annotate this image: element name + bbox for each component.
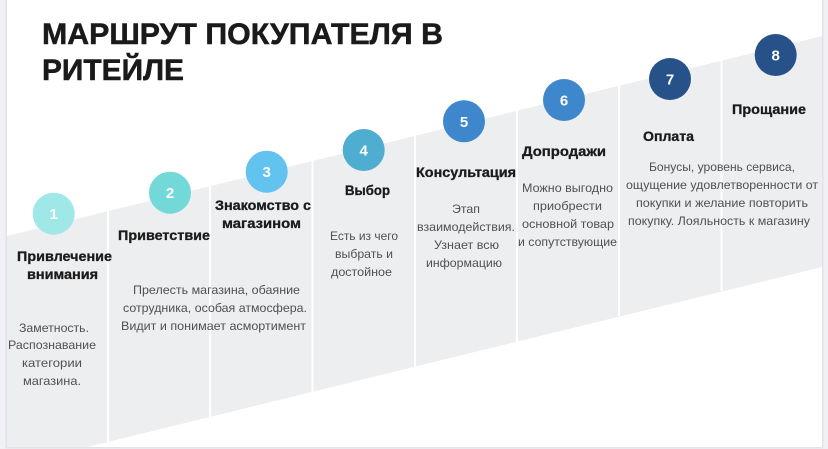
step 3: магазином bbox=[222, 216, 301, 231]
step 1: Привлечение bbox=[17, 249, 113, 264]
step 6: и сопутствующие bbox=[518, 235, 617, 249]
step 7: покупки и желание повторить bbox=[636, 196, 808, 210]
step 1: 1 bbox=[50, 206, 58, 223]
title: МАРШРУТ ПОКУПАТЕЛЯ В bbox=[42, 18, 443, 51]
step 5: Консультация bbox=[416, 165, 516, 180]
step 5: Этап bbox=[452, 202, 480, 216]
step 8 bbox=[732, 34, 807, 117]
step 6: Допродажи bbox=[522, 144, 606, 159]
step 4: 4 bbox=[360, 142, 369, 160]
step 1: Заметность. bbox=[19, 321, 89, 335]
step 6: 6 bbox=[560, 92, 568, 110]
step 6 bbox=[518, 79, 617, 249]
step 4: Есть из чего bbox=[330, 229, 398, 243]
step 8: 8 bbox=[772, 48, 780, 64]
step 7 bbox=[626, 58, 819, 228]
step 1 bbox=[8, 193, 113, 388]
step 3: Знакомство с bbox=[215, 198, 312, 213]
step 6: Можно выгодно bbox=[522, 181, 613, 195]
step 4: Выбор bbox=[345, 183, 390, 198]
step 2: Видит и понимает асмортимент bbox=[121, 319, 307, 333]
step 3: 3 bbox=[263, 164, 271, 181]
step 2: 2 bbox=[166, 185, 174, 202]
step 1: Распознавание bbox=[8, 338, 96, 352]
step 6: основной товар bbox=[522, 217, 614, 231]
step 2: сотрудника, особая атмосфера. bbox=[123, 301, 307, 315]
step 7: Бонусы, уровень сервиса, bbox=[649, 160, 795, 174]
step 1: внимания bbox=[27, 267, 98, 282]
step 4: выбрать и bbox=[335, 247, 393, 261]
step 1: категории bbox=[22, 356, 82, 370]
step 4 bbox=[330, 129, 398, 279]
title bbox=[42, 18, 443, 87]
step 7: покупку. Лояльность к магазину bbox=[628, 214, 810, 228]
step 7: 7 bbox=[666, 72, 674, 88]
step 8: Прощание bbox=[732, 102, 807, 117]
step 2 bbox=[118, 172, 307, 333]
step 5: информацию bbox=[426, 256, 502, 270]
title: РИТЕЙЛЕ bbox=[42, 53, 184, 87]
step 1: магазина. bbox=[23, 374, 81, 388]
step 7: Оплата bbox=[643, 129, 695, 144]
step 2: Прелесть магазина, обаяние bbox=[133, 283, 300, 297]
step 3 bbox=[215, 151, 312, 231]
step 5: взаимодействия. bbox=[417, 220, 515, 234]
step 4: достойное bbox=[331, 265, 392, 279]
step 6: приобрести bbox=[533, 199, 602, 213]
step 5 bbox=[416, 100, 516, 270]
step 5: Узнает всю bbox=[434, 238, 499, 252]
step 2: Приветствие bbox=[118, 228, 211, 243]
step 7: ощущение удовлетворенности от bbox=[626, 178, 819, 192]
step 5: 5 bbox=[460, 114, 468, 131]
